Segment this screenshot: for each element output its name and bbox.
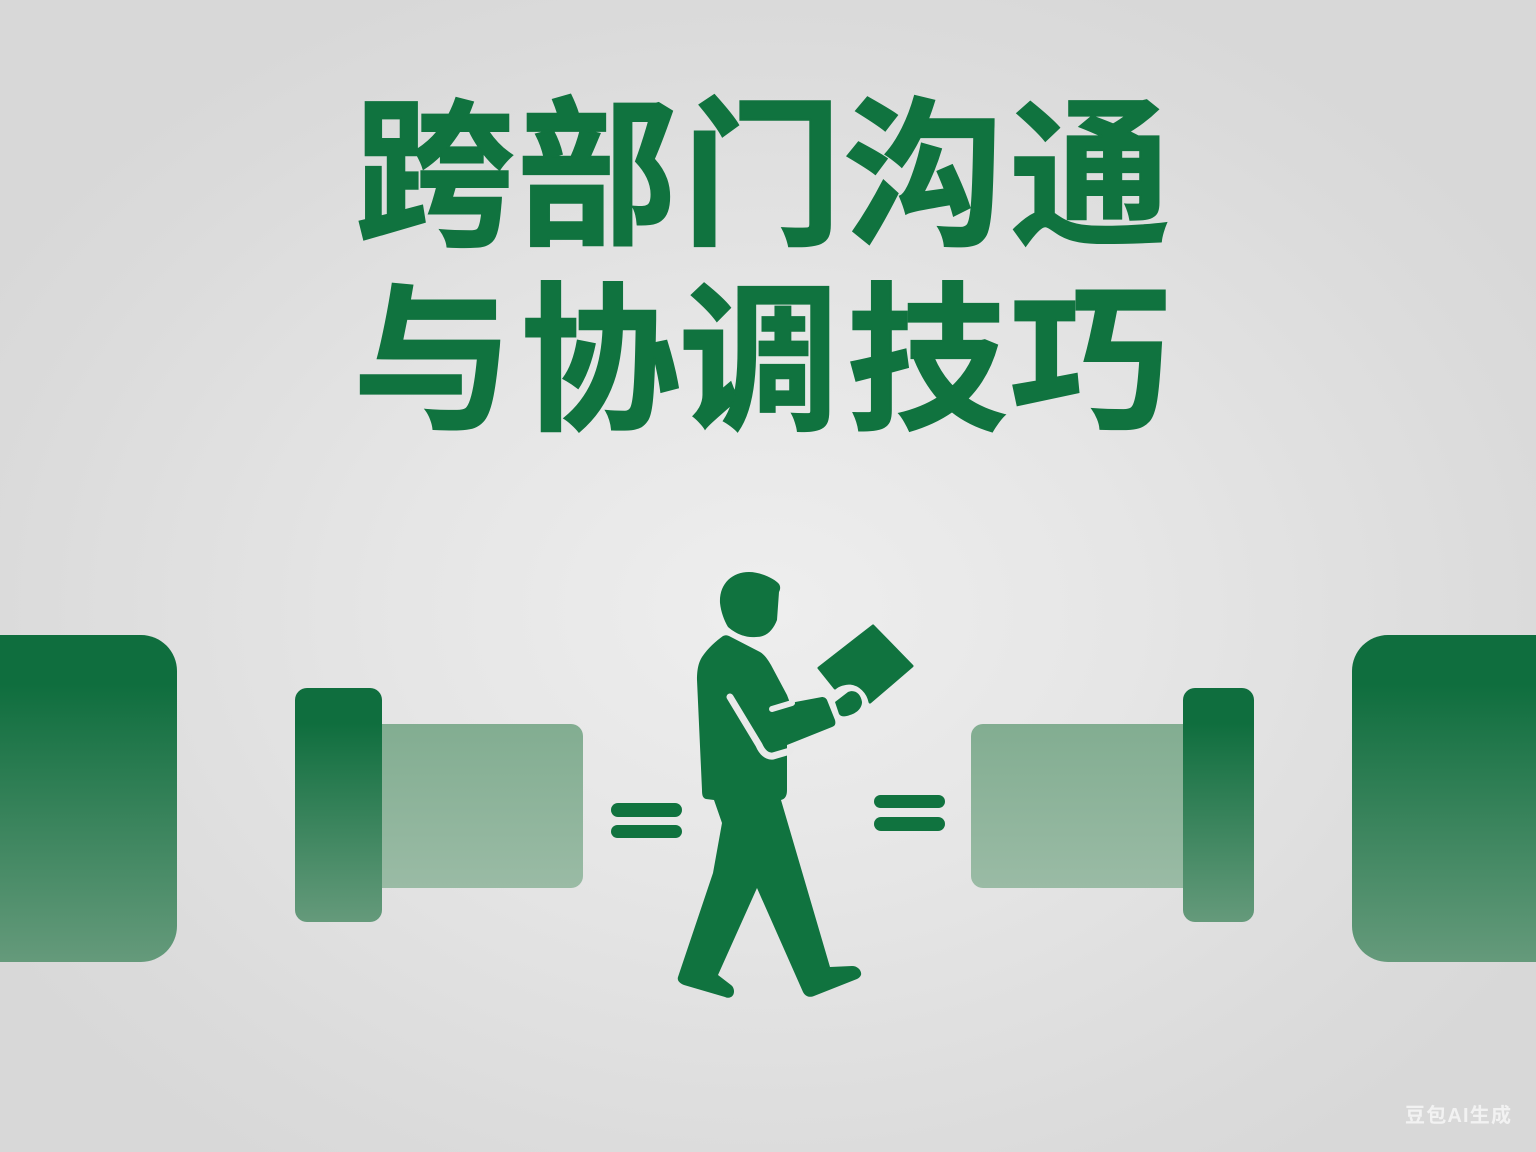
- title line 1: 跨: [355, 87, 515, 266]
- person reading icon: [678, 572, 912, 998]
- right department block: [1352, 635, 1536, 962]
- title line 2: 调: [679, 272, 839, 451]
- title line 1: 沟: [844, 87, 1004, 266]
- left equals icon: [611, 803, 682, 838]
- title: [353, 87, 1170, 451]
- title line 2: 技: [847, 272, 1007, 451]
- title line 1: 通: [1010, 87, 1170, 266]
- title line 1: [355, 87, 1170, 266]
- watermark: 豆包AI生成: [1405, 1105, 1512, 1127]
- title line 1: 部: [517, 87, 677, 266]
- title line 2: [353, 272, 1170, 451]
- title line 2: 巧: [1010, 272, 1170, 451]
- title line 1: 门: [682, 87, 842, 266]
- left connector: [295, 688, 583, 922]
- title line 2: 协: [520, 272, 680, 451]
- left department block: [0, 635, 177, 962]
- right equals icon: [874, 795, 945, 831]
- right connector: [971, 688, 1254, 922]
- title line 2: 与: [353, 272, 513, 451]
